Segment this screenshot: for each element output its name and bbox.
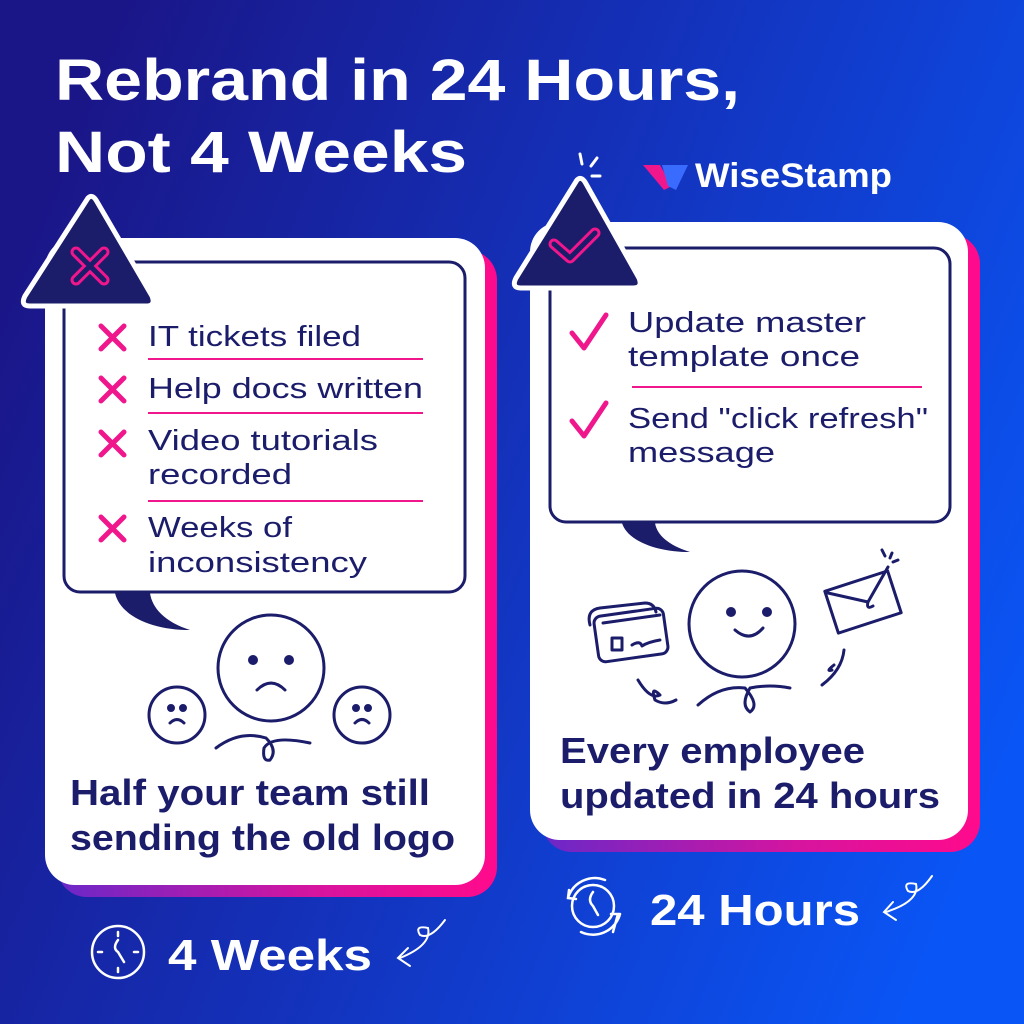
caption: half your team [70,772,455,858]
icon: happy face with card and envelope [589,550,901,712]
speech bubble: list of old steps: IT tickets filed [148,321,361,353]
speech bubble: list of new steps: Send "click refresh" [628,403,928,435]
title: Rebrand in 24 Hours, [55,48,740,113]
speech bubble: list of new steps [550,248,950,552]
icon: sad faces [149,615,390,760]
label: 4 weeks [92,920,445,980]
speech bubble: list of old steps: Weeks of [148,512,293,544]
speech bubble: list of old steps [64,262,465,630]
speech bubble: list of old steps: inconsistency [148,547,368,579]
title: Not 4 Weeks [55,120,467,185]
speech bubble: list of old steps: Help docs written [148,373,423,405]
speech bubble: list of new steps: template once [628,341,860,373]
caption: every employee: updated in 24 hours [560,775,940,816]
speech bubble: list of old steps: recorded [148,459,292,491]
icon: warning triangle with X [23,196,153,306]
speech bubble: list of old steps: Video tutorials [148,425,378,457]
caption: every employee: Every employee [560,730,865,771]
title [55,48,740,185]
caption: half your team: sending the old logo [70,817,455,858]
label: 24 hours [568,876,932,935]
caption: half your team: Half your team still [70,772,430,813]
label: 24 hours: 24 Hours [650,886,860,935]
label: 4 weeks: 4 Weeks [168,931,372,980]
speech bubble: list of new steps: Update master [628,307,866,339]
icon: check triangle [514,154,640,288]
panel: old way (4 weeks) [23,196,497,897]
caption: every employee [560,730,940,816]
logo: WiseStamp: WiseStamp [695,157,892,195]
speech bubble: list of new steps: message [628,437,775,469]
panel: WiseStamp way (24 hours) [514,154,980,852]
